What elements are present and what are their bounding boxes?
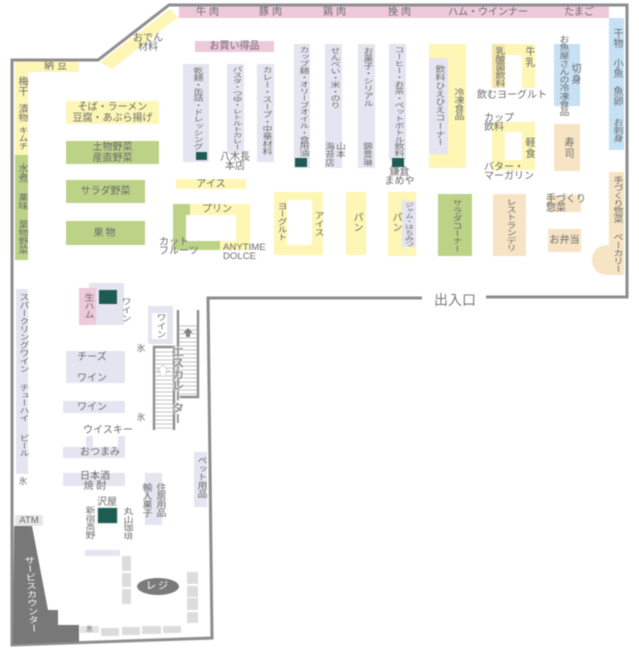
label: escalator: エスカレーター (169, 346, 184, 424)
panel: fruit: 果物 (94, 228, 118, 238)
label: salad corner: サラダコーナー (450, 199, 461, 252)
label: Maruyama Coffee: 丸山珈琲 (121, 507, 132, 540)
label: yogurt: ヨーグルト (275, 202, 286, 241)
panel: curry soup shelf (257, 64, 274, 162)
panel: wine: ワイン (77, 402, 107, 412)
label: homemade deli: 手づくり惣菜 (611, 176, 622, 223)
panel: light meals rack (492, 122, 535, 170)
label: beef: 牛肉 (196, 6, 222, 18)
panel: cup noodles shelf (294, 44, 310, 168)
label: kimchi: キムチ (16, 126, 27, 150)
panel: left green column (15, 155, 28, 260)
panel: chilled drinks corner (429, 58, 448, 154)
panel: yogurt and ice rack (274, 192, 323, 255)
label: cup drinks: 飲料 (484, 122, 504, 132)
panel: sushi (554, 124, 580, 171)
panel: escalator-side wine shelf (148, 306, 173, 344)
panel: ice box: 氷 (86, 626, 93, 632)
label: curry soup chinese: カレー・スープ・中華材料 (260, 66, 271, 155)
panel: cheese and wine: ワイン (77, 372, 107, 384)
panel: sweets and cereal shelf (358, 44, 375, 168)
panel: bento boxes: お弁当 (550, 235, 580, 246)
label: frozen foods: 冷凍食品 (452, 88, 463, 120)
label: cut fruit (159, 236, 199, 256)
icon: shop logo (98, 508, 117, 523)
label: Yamamoto seaweed shop (323, 142, 346, 167)
label: sweets and cereal: お菓子・シリアル (361, 47, 372, 107)
panel: checkout lane right (187, 612, 198, 623)
panel: fish column (609, 18, 624, 150)
panel: salad vegetables (66, 180, 145, 203)
panel: pasta shelf (227, 64, 244, 154)
label: cup drinks: カップ (484, 112, 514, 124)
icon: shop logo (196, 152, 207, 160)
label: pickled plums: 梅干 (16, 76, 27, 96)
label: bakery: ベーカリー (611, 233, 622, 273)
panel: noodles and cans shelf (183, 64, 209, 162)
label: eggs: たまご (564, 6, 594, 18)
label: Yagicho main store (220, 150, 250, 172)
label: noodles cans dressing: 乾麺・缶詰・ドレッシング (191, 67, 202, 150)
panel: small shelf (85, 550, 120, 556)
panel: left yellow column (15, 72, 28, 155)
panel: dairy drinks rack (492, 44, 535, 88)
panel: salad vegetables: サラダ野菜 (80, 186, 130, 197)
label: sake and shochu (80, 470, 110, 492)
label: sushi: 寿司 (562, 137, 573, 159)
label: Kamakura Mameya: 鎌倉 (390, 167, 410, 178)
panel: root vegetables: 土物野菜 (92, 142, 132, 152)
label: ice: 氷 (137, 412, 145, 422)
panel: rack opening (287, 200, 312, 245)
panel: rice crackers shelf (325, 44, 342, 168)
panel: wine (63, 401, 125, 413)
panel: natto band: 納豆 (44, 61, 70, 72)
panel: raw ham (79, 288, 96, 325)
label: ham and sausage: ハム・ウインナー (448, 6, 528, 18)
icon: wine shop logo (99, 290, 117, 304)
panel: root vegetables: 産直野菜 (92, 153, 132, 164)
panel: rack opening (505, 132, 522, 160)
label: Yagicho main store: 八木長 (220, 152, 250, 162)
panel: oden diagonal shelf (100, 8, 178, 70)
label: pickles: 漬物 (16, 104, 27, 122)
label: cup drinks (484, 112, 514, 132)
panel: noodles and tofu: そば・ラーメン (78, 102, 147, 112)
panel: bread (346, 192, 366, 255)
panel: ice box (80, 626, 99, 633)
label: oden ingredients: おでん (133, 32, 163, 44)
label: oden ingredients: 材料 (138, 42, 158, 52)
label: small fish: 小魚 (611, 58, 622, 78)
label: Anytime Dolce: ANYTIME (223, 242, 266, 252)
icon: shop logo (392, 158, 404, 167)
panel: natto band (15, 61, 79, 72)
panel: homemade side dishes (547, 195, 581, 212)
panel: rack opening (505, 55, 522, 88)
panel: shelf opening (152, 313, 167, 339)
label: Yamamoto seaweed shop: 海苔店 (323, 142, 334, 166)
label: service counter: サービスカウンター (23, 556, 40, 633)
label: entrance: 出入口 (434, 292, 476, 308)
label: pet goods: ペット用品 (195, 456, 206, 498)
label: chilled drinks corner: 飲料ひえひえコーナー (433, 65, 444, 146)
panel: bread and jam (388, 192, 416, 256)
label: raw ham: 生ハム (82, 293, 93, 318)
panel: checkout lane right (187, 598, 198, 610)
panel: ATM: ATM (19, 515, 39, 526)
label: rice crackers: せんべい・米・のり (328, 47, 339, 108)
label: oden ingredients (133, 32, 163, 52)
panel: ATM (15, 515, 43, 526)
label: light meals: 軽食 (523, 137, 534, 159)
label: sashimi cuts: 切身 (569, 63, 580, 85)
panel: household goods (145, 473, 162, 525)
panel: salad corner (438, 194, 472, 256)
label: jam and honey: ジャム・はちみつ (404, 202, 414, 247)
label: bread: パン (351, 212, 362, 232)
label: sake and shochu: 焼 酎 (84, 481, 106, 492)
label: ice: 氷 (137, 343, 145, 353)
panel: checkout lane bottom (122, 627, 140, 635)
label: wine: ワイン (119, 297, 130, 322)
label: Anytime Dolce (222, 242, 266, 262)
panel: coffee and tea shelf (389, 44, 406, 160)
panel: whisky rack (86, 436, 125, 447)
panel: checkout lane right (187, 572, 198, 584)
panel: bakery semicircle (592, 245, 622, 275)
panel: checkout lane right (187, 586, 198, 597)
label: ice cream: アイス (312, 211, 323, 236)
panel: snacks (63, 447, 125, 458)
label: Kamakura Mameya (384, 166, 414, 187)
panel: noodles and tofu: 豆腐・あぶら揚げ (72, 113, 152, 124)
label: cut fruit: フルーツ (159, 246, 199, 256)
panel: root vegetables (66, 141, 159, 164)
escalator (152, 309, 200, 431)
panel: lactic drinks (492, 44, 505, 88)
label: sparkling wine: スパークリングワイン (17, 293, 28, 373)
panel: frozen foods (429, 44, 466, 168)
label: Yagicho main store: 本店 (225, 160, 245, 172)
panel: ice cream band (176, 179, 246, 189)
label: roe: 魚卵 (611, 86, 622, 106)
panel: wine shelf (89, 283, 124, 325)
label: coffee and tea: コーヒー・お茶・ペットボトル飲料 (392, 46, 403, 156)
label: Kamakura Mameya: まめや (384, 176, 414, 187)
label: sashimi: お刺身 (611, 118, 622, 142)
label: fish shop frozen foods: お魚屋さんの冷凍食品 (557, 35, 568, 116)
label: ice: 氷 (19, 476, 27, 486)
label: restaurant deli: レストランデリ (504, 198, 515, 252)
panel: rack opening (186, 215, 236, 241)
panel: cheese and wine: チーズ (77, 352, 107, 362)
label: cup noodles oil: カップ麺・オリーブオイル・食用油 (297, 46, 308, 156)
panel: checkout lane bottom (142, 626, 161, 634)
label: pork: 豚肉 (259, 6, 285, 18)
label: minced meat: 挽肉 (388, 6, 414, 18)
panel: top meat band (179, 6, 609, 18)
label: homemade side dishes: 惣菜 (546, 202, 566, 214)
label: condiments: 薬味 (16, 193, 27, 210)
panel: fruit (66, 221, 145, 245)
label: drinking yogurt: 飲むヨーグルト (477, 90, 547, 100)
label: Shinjuku Takano: 新宿高野 (83, 506, 94, 539)
label: Anytime Dolce: DOLCE (223, 250, 256, 262)
panel: noodles and tofu (66, 101, 159, 124)
label: leafy vegetables: 葉物野菜 (16, 220, 27, 254)
label: butter and margarine: マーガリン (484, 170, 534, 182)
panel: checkout lane left (122, 589, 131, 604)
label: sake and shochu: 日本酒 (80, 471, 110, 482)
panel: bento boxes (548, 229, 581, 252)
label: homemade side dishes (546, 192, 586, 214)
label: Sawaya: 沢屋 (97, 496, 117, 508)
label: household goods: 住居用品 (154, 483, 165, 517)
label: pudding: プリン (202, 204, 232, 215)
panel: register: レジ (146, 581, 170, 592)
panel: rack opening (93, 436, 118, 447)
panel: bargain items (195, 41, 274, 52)
panel: ice cream band: アイス (196, 178, 226, 190)
label: cut fruit: カット (159, 236, 189, 248)
label: Kinhorin: 錦豊琳 (361, 142, 372, 166)
label: whisky: ウイスキー (83, 425, 133, 436)
panel: sashimi cuts (554, 44, 580, 106)
label: butter and margarine: バター・ (484, 162, 524, 172)
label: butter and margarine (484, 161, 534, 182)
panel: pet goods (194, 452, 207, 507)
panel: cut fruit green corner (173, 204, 190, 250)
label: bread: パン (390, 212, 401, 232)
label: chicken: 鶏肉 (323, 6, 349, 18)
panel: service counter (12, 525, 80, 644)
icon: shop logo (295, 158, 307, 167)
panel: restaurant deli (493, 194, 526, 256)
panel: snacks: おつまみ (80, 447, 120, 458)
label: chu-hi: チューハイ (17, 384, 28, 422)
label: beer: ビール (17, 434, 28, 457)
panel: checkout lane bottom (101, 628, 119, 636)
label: pasta and curry: パスタ・つゆ・レトルトカレー (230, 66, 241, 150)
panel: jam and honey (402, 201, 416, 247)
label: wine: ワイン (154, 313, 165, 338)
panel: bargain items: お買い得品 (210, 41, 260, 52)
panel: sake and shochu (63, 473, 125, 486)
label: dried fish: 干物 (611, 28, 622, 48)
panel: checkout lane left (122, 556, 131, 571)
label: lactic drinks: 乳酸菌飲料 (493, 47, 504, 87)
panel: checkout lane left (122, 573, 131, 587)
panel: pudding rack (173, 204, 250, 250)
panel: cheese and wine (66, 351, 125, 383)
panel: sparkling wine column (16, 289, 28, 474)
label: Yamamoto seaweed shop: 山本 (334, 142, 345, 158)
label: milk: 牛乳 (523, 46, 534, 68)
panel: checkout lane bottom (163, 626, 181, 633)
panel: register (137, 578, 179, 595)
panel: deli and bakery column (609, 172, 624, 275)
panel: cut fruit green bottom (173, 241, 220, 250)
label: homemade side dishes: 手づくり (546, 194, 586, 204)
label: boiled foods: 水煮 (16, 163, 27, 183)
label: imported sweets: 輸入菓子 (140, 483, 151, 517)
